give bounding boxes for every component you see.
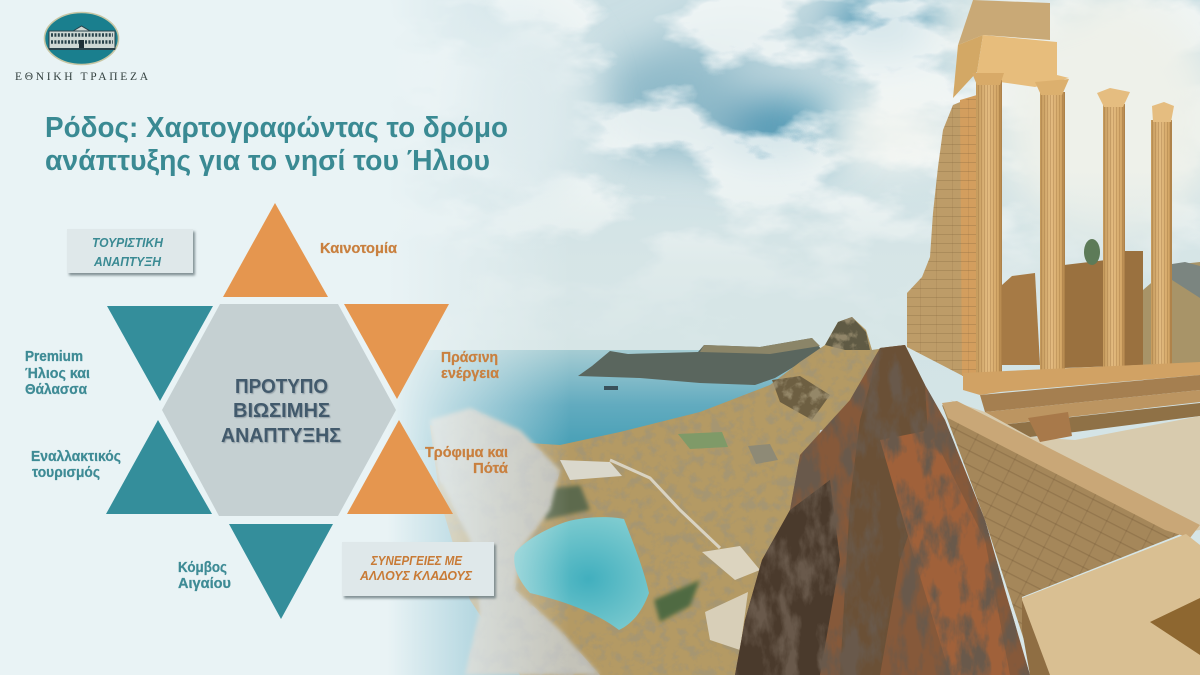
triangle: bottom teal — [229, 524, 333, 619]
foreground stone corner — [1022, 534, 1200, 675]
center label: ΠΡΟΤΥΠΟ — [235, 376, 328, 398]
label: food and drink: Τρόφιμα και — [425, 445, 508, 461]
triangle: lower right orange — [347, 420, 453, 514]
label: innovation: Καινοτομία — [320, 241, 397, 257]
label: food and drink — [425, 445, 508, 477]
triangle: upper right orange — [344, 304, 449, 399]
triangle: upper left teal — [107, 306, 213, 401]
entablature — [953, 0, 1069, 98]
label: green energy — [441, 350, 499, 382]
terrace parapet wall — [942, 405, 1186, 640]
label: alternative tourism — [31, 449, 121, 481]
label: Aegean hub — [178, 560, 231, 592]
callout: tourism development: ΤΟΥΡΙΣΤΙΚΗ — [92, 236, 164, 250]
left rocky shore — [430, 408, 600, 675]
center label: ΒΙΩΣΙΜΗΣ — [233, 400, 330, 422]
label: Aegean hub: Κόμβος — [178, 560, 227, 576]
label: green energy: Πράσινη — [441, 350, 498, 366]
far headland — [578, 338, 822, 385]
background photo: Lindos acropolis and bay — [398, 0, 1200, 675]
tree — [1084, 239, 1100, 265]
center label — [221, 376, 341, 447]
label: premium sun and sea: Θάλασσα — [25, 382, 87, 398]
callout: synergies with other sectors — [342, 542, 494, 596]
red cliff — [735, 345, 1030, 675]
terrace floor — [950, 400, 1200, 532]
label: premium sun and sea: Premium — [25, 349, 83, 365]
callout: synergies with other sectors: ΑΛΛΟΥΣ ΚΛΑΔΟΥΣ — [359, 569, 473, 583]
label: green energy: ενέργεια — [441, 366, 499, 382]
triangle: lower left teal — [106, 420, 212, 514]
center label: ΑΝΑΠΤΥΞΗΣ — [221, 425, 341, 447]
callout: tourism development: ΑΝΑΠΤΥΞΗ — [93, 255, 162, 269]
label: Aegean hub: Αιγαίου — [178, 576, 231, 592]
turquoise bay — [514, 517, 649, 630]
temple columns — [972, 73, 1174, 376]
temple steps — [963, 362, 1200, 395]
hill and hillside land — [430, 317, 905, 675]
logo: National Bank of Greece — [15, 12, 149, 83]
sky with clouds — [300, 0, 1200, 360]
logo emblem — [44, 12, 118, 64]
label: alternative tourism: τουρισμός — [32, 465, 100, 481]
label: premium sun and sea — [25, 349, 90, 398]
temple wall — [907, 95, 977, 376]
logo wordmark: ΕΘΝΙΚΗ ΤΡΑΠΕΖΑ — [15, 71, 149, 83]
center hexagon — [162, 304, 396, 516]
title — [45, 112, 508, 177]
title: Ρόδος: Χαρτογραφώντας το δρόμο — [45, 112, 508, 144]
temple back ruins — [1002, 273, 1040, 365]
label: food and drink: Πότά — [473, 461, 508, 477]
boats — [604, 386, 618, 390]
label: alternative tourism: Εναλλακτικός — [31, 449, 121, 465]
sea — [370, 350, 830, 460]
callout: tourism development — [67, 229, 193, 273]
callout: synergies with other sectors: ΣΥΝΕΡΓΕΙΕΣ ΜΕ — [370, 554, 463, 568]
title: ανάπτυξης για το νησί του Ήλιου — [45, 145, 490, 177]
hexagram diagram — [106, 203, 453, 619]
label: premium sun and sea: Ήλιος και — [25, 366, 90, 382]
left fade over photo — [0, 0, 570, 675]
triangle: top orange — [223, 203, 328, 297]
